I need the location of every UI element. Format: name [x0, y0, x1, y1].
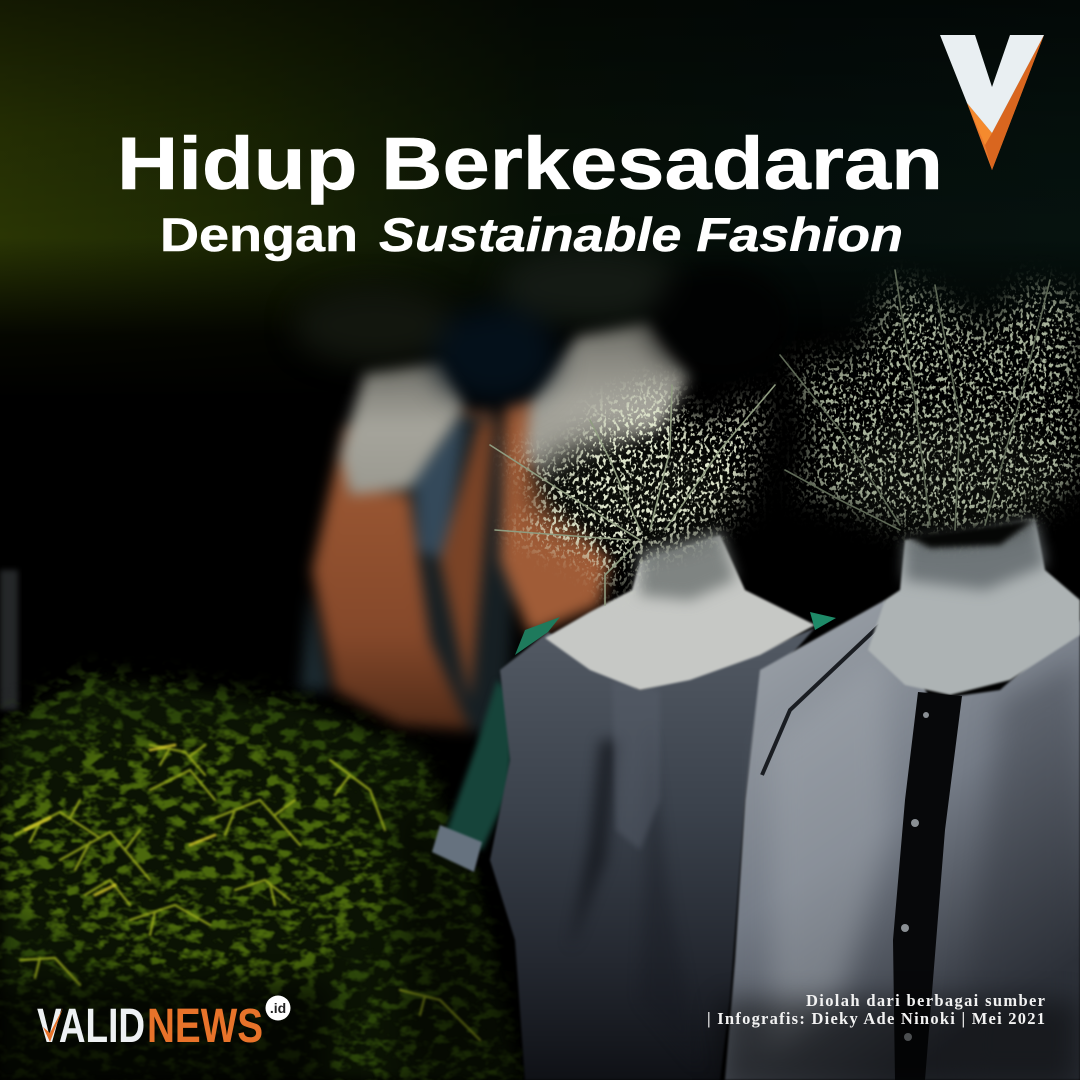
seam [762, 625, 880, 775]
logo: Valid News: .id [270, 1000, 286, 1016]
fern sprays [15, 745, 480, 1040]
cuff [432, 825, 482, 872]
shirt folds [570, 720, 700, 1070]
collar and neck [545, 535, 815, 690]
logo: Valid News: VALID [37, 1000, 145, 1053]
neck [868, 518, 1080, 695]
middle mannequin [432, 530, 836, 1080]
source credit [707, 991, 1045, 1028]
black placket [893, 692, 962, 1080]
right mannequin [720, 518, 1080, 1080]
back mannequins [300, 320, 690, 740]
bush [0, 670, 530, 1080]
shirt [725, 600, 1080, 1080]
blurred plants on back mannequins [295, 247, 790, 403]
shirt shadow on right [960, 660, 1080, 1080]
shirt body [490, 628, 815, 1080]
green trim [810, 612, 836, 630]
logo: Valid News: NEWS [147, 1000, 263, 1053]
bottom dark fade [720, 1000, 1080, 1080]
logo: Valid News [37, 996, 290, 1053]
back-right neck [525, 320, 690, 485]
icon: V logo [940, 35, 1044, 170]
plant on middle mannequin [490, 385, 775, 605]
subtitle: Dengan [160, 208, 358, 261]
highlight [770, 650, 890, 1050]
source credit: | Infografis: Dieky Ade Ninoki | Mei 2021 [707, 1009, 1045, 1028]
subtitle [160, 208, 903, 261]
subtitle: Sustainable Fashion [379, 208, 903, 261]
back-left dark trim [408, 415, 515, 740]
teal sleeve [445, 680, 515, 850]
buttons [901, 712, 929, 1041]
back-left neck [340, 360, 465, 495]
title: Hidup Berkesadaran [117, 122, 943, 205]
back-right orange top [500, 395, 610, 635]
source credit: Diolah dari berbagai sumber [806, 991, 1045, 1010]
back-left orange top [312, 410, 495, 730]
plant on right mannequin [780, 270, 1080, 548]
